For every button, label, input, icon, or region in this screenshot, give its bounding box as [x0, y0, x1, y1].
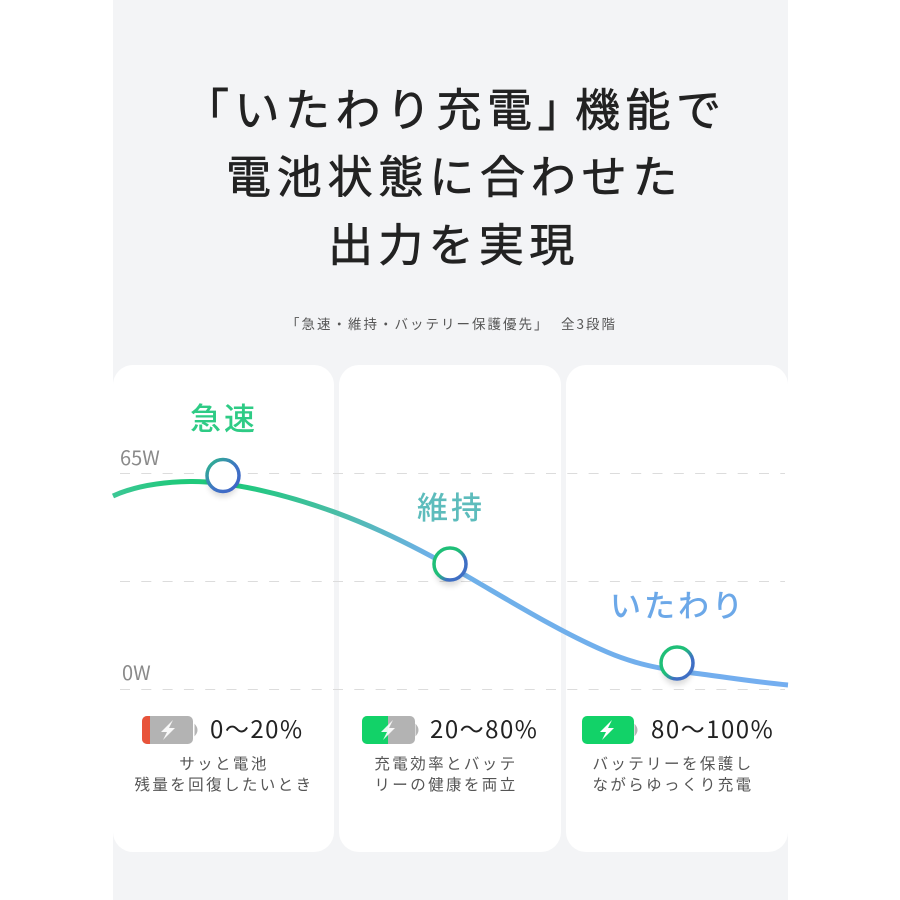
range: 80 to 100 percent: 80〜100% — [651, 710, 774, 745]
range: 0 to 20 percent: 0〜20% — [210, 710, 304, 745]
icon: battery full — [582, 716, 637, 744]
grid line 0W — [120, 688, 785, 690]
range: 20 to 80 percent: 20〜80% — [430, 710, 538, 745]
grid line 65W — [120, 472, 785, 474]
marker: fast — [207, 460, 239, 497]
description: fast charge: 残量を回復したいとき — [134, 773, 314, 795]
axis label 65W: 65W — [120, 442, 160, 471]
label: maintain: 維持 — [417, 483, 485, 528]
description: gentle charge: ながらゆっくり充電 — [592, 773, 754, 795]
title: 電池状態に合わせた — [226, 141, 683, 206]
panel: gentle card — [566, 365, 788, 852]
grid line middle — [120, 580, 785, 582]
description: fast charge — [134, 752, 314, 795]
subtitle: 「急速・維持・バッテリー保護優先」 — [286, 313, 550, 333]
label: gentle charge: いたわり — [610, 581, 746, 626]
panel: maintain card — [339, 365, 561, 852]
marker: gentle — [661, 647, 693, 685]
description: fast charge: サッと電池 — [179, 752, 269, 774]
description: maintain: リーの健康を両立 — [374, 773, 518, 795]
description: maintain: 充電効率とバッテ — [374, 752, 518, 774]
marker: maintain — [434, 548, 466, 586]
subtitle: 全3段階 — [561, 313, 617, 333]
chart: output curve — [113, 442, 788, 690]
title: 「いたわり充電」機能で — [184, 74, 727, 139]
title — [184, 74, 727, 274]
title: 出力を実現 — [328, 209, 580, 274]
label: fast charge: 急速 — [190, 394, 258, 439]
axis label 0W: 0W — [122, 657, 151, 686]
background panel — [113, 0, 788, 900]
description: gentle charge: バッテリーを保護し — [592, 752, 754, 774]
icon: battery mid — [362, 716, 418, 744]
icon: battery low — [142, 716, 197, 744]
panel: fast charge card — [113, 365, 334, 852]
description: maintain — [374, 752, 518, 795]
curve line — [113, 481, 788, 685]
description: gentle charge — [592, 752, 754, 795]
